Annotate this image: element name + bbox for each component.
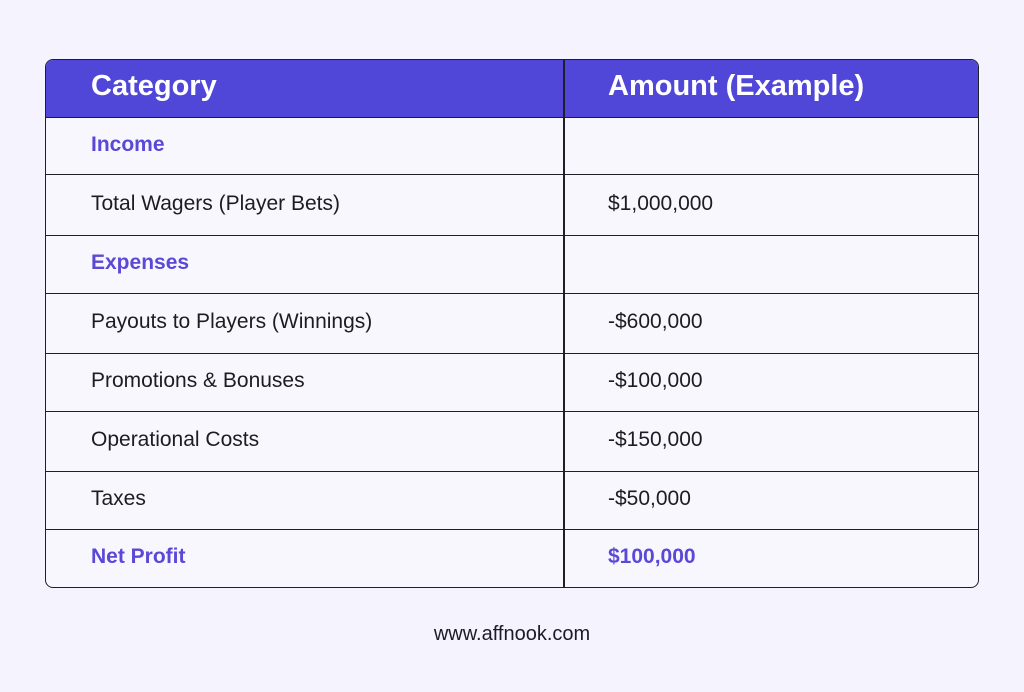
row: expenses: Expenses	[91, 251, 189, 274]
row: promotions: Promotions & Bonuses	[91, 369, 305, 392]
row: total wagers: Total Wagers (Player Bets)	[91, 192, 340, 214]
row: expenses	[46, 235, 978, 294]
row: net profit: Net Profit	[91, 545, 186, 568]
row: promotions: -$100,000	[608, 369, 703, 392]
row: income: Income	[91, 132, 165, 156]
table	[45, 59, 979, 588]
row: total wagers: $1,000,000	[608, 192, 713, 214]
row: taxes: Taxes	[91, 487, 146, 510]
row: operational: Operational Costs	[91, 428, 259, 451]
row: net profit	[46, 529, 978, 588]
header row	[46, 60, 978, 117]
row: payouts	[46, 293, 978, 354]
row: taxes	[46, 471, 978, 530]
header row: Category	[91, 70, 217, 102]
header row: Amount (Example)	[608, 70, 864, 102]
row: operational: -$150,000	[608, 428, 703, 451]
row: total wagers	[46, 174, 978, 236]
row: operational	[46, 411, 978, 472]
row: payouts: Payouts to Players (Winnings)	[91, 310, 372, 333]
footer url: www.affnook.com	[434, 623, 590, 645]
row: promotions	[46, 353, 978, 412]
row: taxes: -$50,000	[608, 487, 691, 510]
row: income	[46, 117, 978, 175]
row: payouts: -$600,000	[608, 310, 703, 333]
row: net profit: $100,000	[608, 545, 696, 568]
